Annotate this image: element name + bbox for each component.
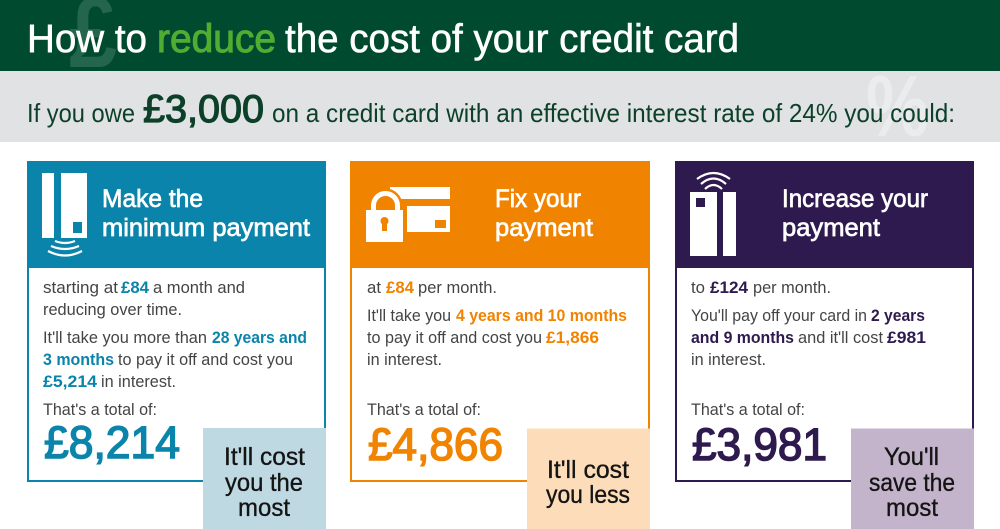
subtitle text: If you owe [27,98,135,128]
body text: reducing over time. [43,300,182,319]
body text: £5,214 [43,372,98,391]
body text: at [367,278,381,297]
body text: and 9 months [691,328,794,347]
icon: contactless card [690,173,736,256]
heading: minimum payment [102,214,310,242]
body text: It'll take you more than [43,328,207,347]
body text: £124 [710,278,749,297]
callout [203,428,326,529]
heading: payment [495,214,593,242]
subtitle band [0,59,1000,155]
heading [102,185,310,242]
body text: 28 years and [212,328,307,347]
heading: Make the [102,185,203,213]
total figure: £4,866 [368,419,503,470]
body text: in interest. [691,350,766,369]
panel: increase your payment [675,161,974,529]
title: the cost of your credit card [285,17,739,61]
body text: starting at [43,278,118,297]
subtitle text: £3,000 [143,88,264,131]
callout [851,428,974,529]
total figure: £3,981 [692,419,827,470]
callout: most [238,494,290,522]
panel: make the minimum payment [27,161,326,529]
body text: to pay it off and cost you [118,350,293,369]
total figure: £8,214 [44,417,180,468]
heading [495,185,593,242]
title: How to [27,17,147,61]
title [27,17,739,61]
body text: per month. [418,278,497,297]
body text: 3 months [43,350,114,369]
subtitle text: on a credit card with an effective interest rate of 24% you could: [272,98,955,128]
body text: per month. [753,278,831,297]
heading: Fix your [495,185,581,213]
subtitle band: % [866,59,929,155]
body text: 2 years [871,306,925,325]
body text: £1,866 [546,328,599,347]
body text [691,278,926,419]
title: reduce [157,17,276,61]
callout: most [886,494,938,522]
body text: in interest. [101,372,176,391]
panel: fix your payment [350,161,650,529]
body text: It'll take you [367,306,451,325]
body text: to pay it off and cost you [367,328,542,347]
body text [367,278,627,419]
icon: contactless card [42,173,87,256]
callout: It'll cost [547,456,629,484]
body text: That's a total of: [691,400,805,419]
body text: and it'll cost [798,328,883,347]
body text [43,278,307,419]
body text: That's a total of: [43,400,157,419]
subtitle text [27,88,955,131]
heading [782,185,928,242]
callout: It'll cost [224,443,305,471]
body text: You'll pay off your card in [691,306,867,325]
body text: 4 years and 10 months [456,306,627,325]
icon: padlock and card [366,187,450,242]
title banner [0,0,1000,89]
body text: in interest. [367,350,442,369]
heading: Increase your [782,185,928,213]
callout: you the [225,469,303,497]
body text: £84 [121,278,150,297]
callout: You'll [884,443,939,471]
callout: you less [546,481,630,509]
callout [527,428,650,529]
body text: to [691,278,705,297]
body text: That's a total of: [367,400,481,419]
heading: payment [782,214,880,242]
body text: a month and [153,278,245,297]
body text: £981 [887,328,926,347]
body text: £84 [386,278,415,297]
callout: save the [869,469,955,497]
